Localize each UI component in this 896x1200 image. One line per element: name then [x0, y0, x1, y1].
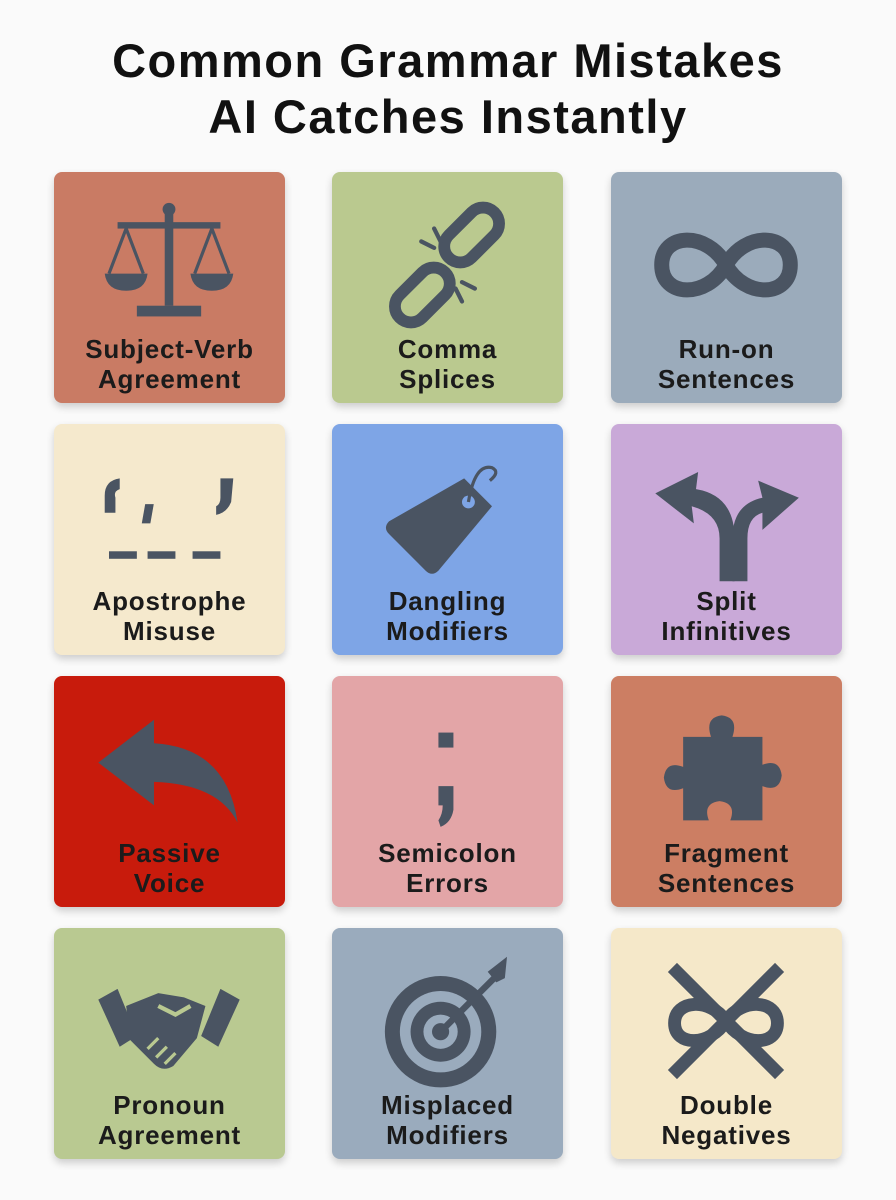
label	[658, 838, 795, 898]
label	[381, 1090, 514, 1150]
card: passive voice	[54, 676, 285, 907]
icon: target	[384, 956, 507, 1088]
label	[93, 586, 246, 646]
label: Pronoun	[113, 1090, 226, 1120]
card: comma splices	[332, 172, 563, 403]
label	[661, 1090, 792, 1150]
icon: semicolon	[438, 732, 454, 827]
label: Sentences	[658, 364, 795, 394]
icon: broken chain	[389, 202, 505, 328]
label: Double	[680, 1090, 773, 1120]
label: Passive	[118, 838, 221, 868]
label: Split	[696, 586, 757, 616]
icon: infinity loop	[654, 232, 798, 298]
label	[118, 838, 221, 898]
label: Splices	[399, 364, 496, 394]
card: subject-verb agreement	[54, 172, 285, 403]
label	[98, 1090, 241, 1150]
label	[661, 586, 792, 646]
card: pronoun agreement	[54, 928, 285, 1159]
icon: puzzle piece	[664, 715, 782, 820]
icon: apostrophes	[104, 478, 234, 559]
label: Negatives	[661, 1120, 792, 1150]
label	[85, 334, 254, 394]
icon: scales	[104, 202, 234, 316]
icon: crossed loops	[668, 962, 784, 1080]
card: split infinitives	[611, 424, 842, 655]
title	[112, 34, 784, 143]
icon: split arrow	[655, 472, 799, 582]
label: Misuse	[123, 616, 216, 646]
label	[658, 334, 795, 394]
title: Common Grammar Mistakes	[112, 34, 784, 87]
label	[398, 334, 497, 394]
label: Infinitives	[661, 616, 792, 646]
icon: curved back arrow	[98, 720, 238, 822]
label: Run-on	[679, 334, 774, 364]
label: Errors	[406, 868, 489, 898]
title: AI Catches Instantly	[208, 90, 688, 143]
label: Subject-Verb	[85, 334, 254, 364]
card: semicolon errors	[332, 676, 563, 907]
label: Apostrophe	[93, 586, 246, 616]
label: Modifiers	[386, 1120, 509, 1150]
icon: tag	[386, 466, 498, 574]
label: Modifiers	[386, 616, 509, 646]
label: Fragment	[664, 838, 789, 868]
card: run-on sentences	[611, 172, 842, 403]
label: Semicolon	[378, 838, 517, 868]
label: Sentences	[658, 868, 795, 898]
label	[378, 838, 517, 898]
card: fragment sentences	[611, 676, 842, 907]
label: Comma	[398, 334, 497, 364]
label	[386, 586, 509, 646]
card: misplaced modifiers	[332, 928, 563, 1159]
label: Misplaced	[381, 1090, 514, 1120]
card: dangling modifiers	[332, 424, 563, 655]
icon: handshake	[98, 989, 240, 1069]
label: Agreement	[98, 364, 241, 394]
card: apostrophe misuse	[54, 424, 285, 655]
label: Dangling	[389, 586, 506, 616]
label: Voice	[134, 868, 205, 898]
label: Agreement	[98, 1120, 241, 1150]
card: double negatives	[611, 928, 842, 1159]
